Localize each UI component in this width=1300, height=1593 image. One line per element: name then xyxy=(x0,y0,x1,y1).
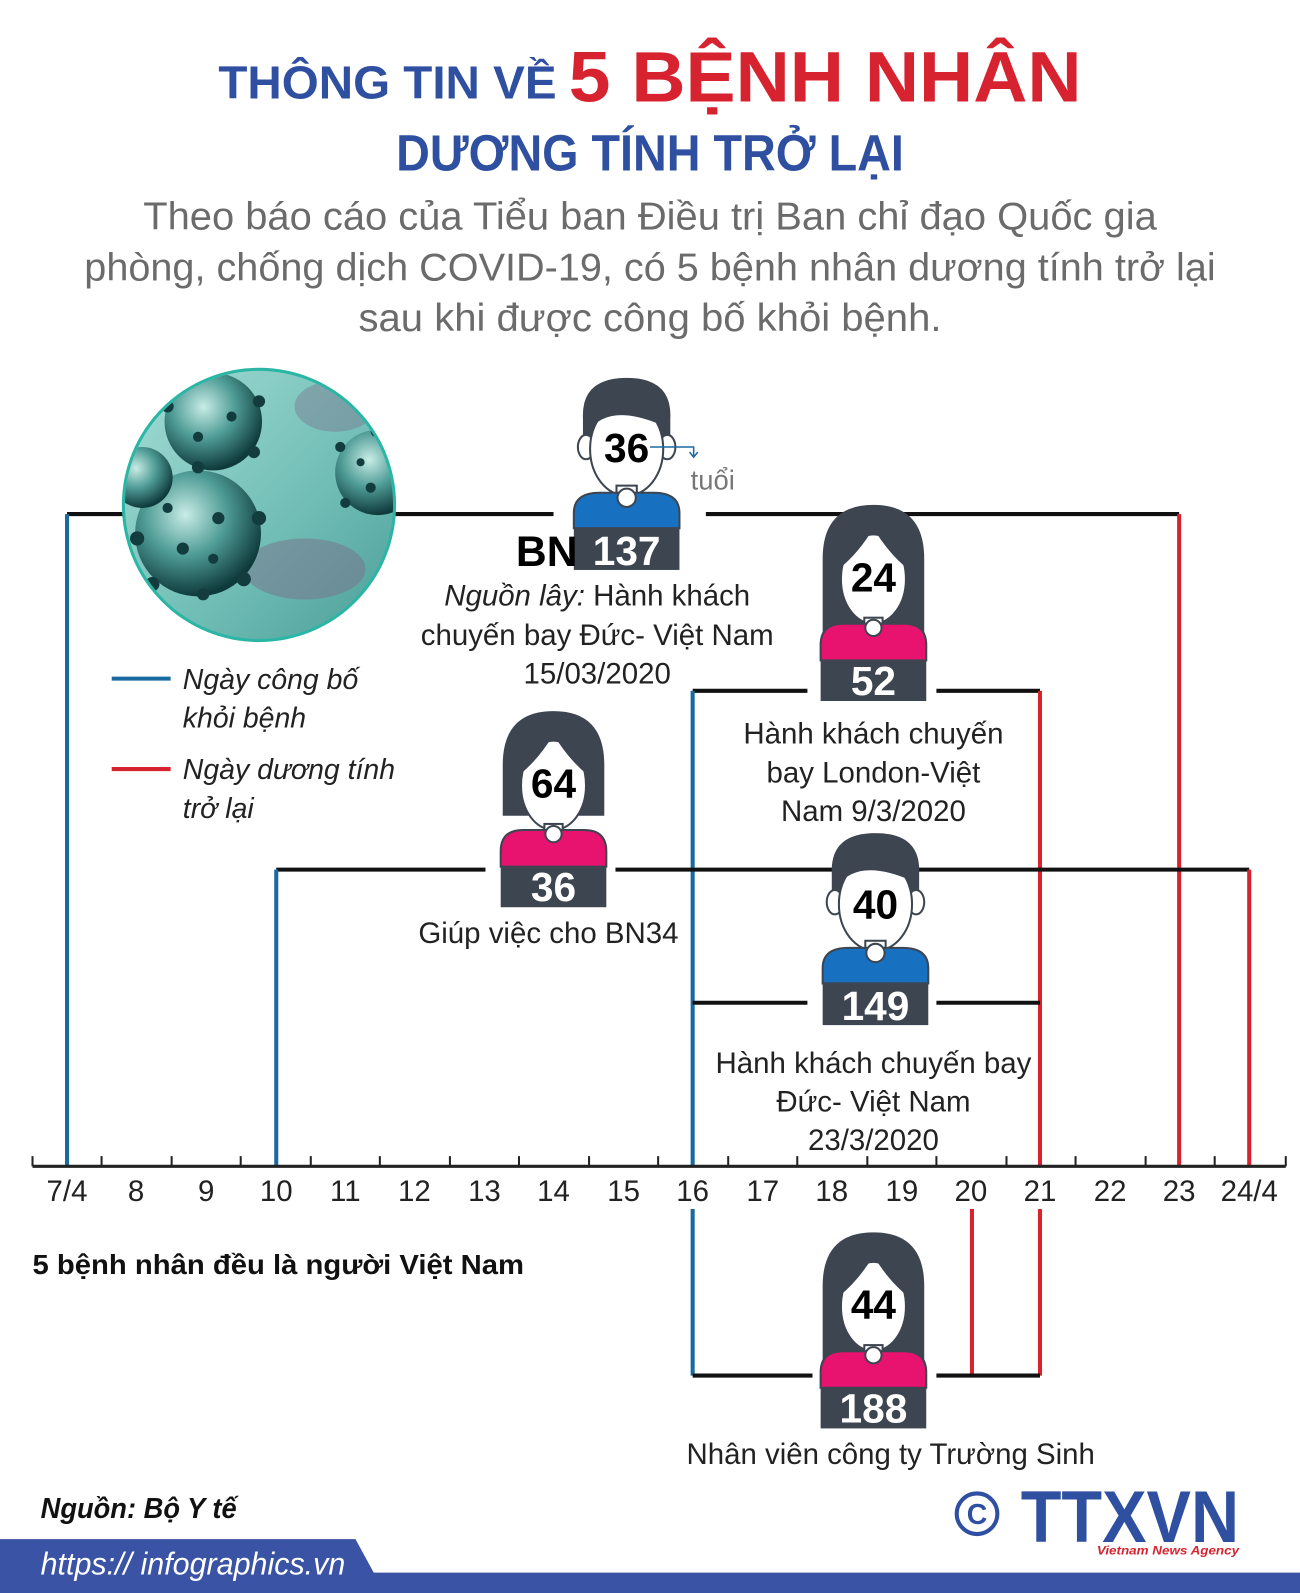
text: BN52 source: Nam 9/3/2020 xyxy=(781,795,966,828)
source: Nguồn: Bộ Y tế xyxy=(41,1493,240,1525)
text: BN137 source: Nguồn lây: Hành khách xyxy=(444,579,750,613)
title: 5 BỆNH NHÂN xyxy=(569,38,1082,118)
legend: Ngày dương tính xyxy=(183,754,395,786)
text: BN137 source xyxy=(421,579,774,691)
patient BN36 (female, 64) xyxy=(501,711,606,910)
logo: TTXVN: C xyxy=(967,1499,987,1531)
patient BN36 (female, 64): 36 xyxy=(531,864,576,910)
patient BN137 (male, 36): 137 xyxy=(593,528,661,574)
date axis: 23 xyxy=(1163,1175,1196,1208)
subtitle xyxy=(84,196,1216,340)
title: THÔNG TIN VỀ xyxy=(218,57,557,109)
text: BN52 source xyxy=(743,718,1004,828)
date axis xyxy=(32,1156,1286,1208)
logo: TTXVN: TTXVN xyxy=(1021,1477,1239,1558)
date axis: 9 xyxy=(198,1175,214,1208)
subtitle: Theo báo cáo của Tiểu ban Điều trị Ban chỉ đạo Quốc gia xyxy=(143,196,1157,239)
note: nationality: 5 bệnh nhân đều là người Việt Nam xyxy=(32,1249,524,1280)
text: BN149 source: Đức- Việt Nam xyxy=(776,1085,971,1118)
date axis: 11 xyxy=(330,1175,361,1208)
patient BN52 (female, 24): 24 xyxy=(851,554,896,600)
patient BN149 (male, 40): 40 xyxy=(853,881,898,927)
patient BN36 (female, 64): 64 xyxy=(531,761,577,807)
date axis: 15 xyxy=(607,1175,640,1208)
patient BN52 (female, 24): 52 xyxy=(851,658,896,704)
date axis: 13 xyxy=(468,1175,501,1208)
text: BN149 source: Hành khách chuyến bay xyxy=(716,1047,1032,1080)
legend: khỏi bệnh xyxy=(183,702,306,734)
text: BN52 source: bay London-Việt xyxy=(767,756,980,789)
text: BN149 source: 23/3/2020 xyxy=(808,1124,939,1157)
patient BN137 (male, 36) xyxy=(516,378,735,576)
date axis: 18 xyxy=(815,1175,848,1208)
date axis: 7/4 xyxy=(47,1175,87,1208)
patient BN137 (male, 36): tuổi xyxy=(691,465,735,496)
legend xyxy=(112,664,395,825)
logo: TTXVN: Vietnam News Agency xyxy=(1097,1543,1240,1557)
subtitle: phòng, chống dịch COVID-19, có 5 bệnh nhân dương tính trở lại xyxy=(84,246,1216,289)
patient BN137 (male, 36): 36 xyxy=(604,425,649,471)
patient BN188 (female, 44): 44 xyxy=(851,1282,896,1328)
date axis: 20 xyxy=(955,1175,987,1208)
date axis: 17 xyxy=(746,1175,779,1208)
date axis: 12 xyxy=(398,1175,431,1208)
text: BN137 source: chuyến bay Đức- Việt Nam xyxy=(421,619,774,652)
date axis: 19 xyxy=(886,1175,918,1208)
text: BN188 source: Nhân viên công ty Trường Sinh xyxy=(687,1438,1095,1471)
subtitle: sau khi được công bố khỏi bệnh. xyxy=(359,297,941,340)
legend: Ngày công bố xyxy=(183,664,360,696)
date axis: 21 xyxy=(1024,1175,1056,1208)
footer band xyxy=(0,1539,1300,1593)
virus image xyxy=(122,368,396,642)
date axis: 22 xyxy=(1094,1175,1126,1208)
patient BN149 (male, 40) xyxy=(823,833,928,1029)
title xyxy=(218,38,1082,182)
date axis: 14 xyxy=(537,1175,570,1208)
patient BN52 (female, 24) xyxy=(821,505,926,704)
footer band: https:// infographics.vn xyxy=(41,1547,345,1582)
patient BN188 (female, 44): 188 xyxy=(840,1385,907,1431)
date axis: 24/4 xyxy=(1221,1175,1278,1208)
date axis: 16 xyxy=(676,1175,709,1208)
text: BN36 source: Giúp việc cho BN34 xyxy=(418,917,679,950)
patient BN149 (male, 40): 149 xyxy=(842,983,909,1029)
patient BN137 (male, 36): BN xyxy=(516,528,578,576)
date axis: 10 xyxy=(260,1175,293,1208)
timeline lines xyxy=(67,514,1249,1376)
text: BN149 source xyxy=(716,1047,1032,1157)
text: BN137 source: 15/03/2020 xyxy=(524,658,671,691)
text: BN52 source: Hành khách chuyến xyxy=(743,718,1004,751)
date axis: 8 xyxy=(128,1175,144,1208)
patient BN188 (female, 44) xyxy=(821,1232,926,1431)
legend: trở lại xyxy=(183,793,254,825)
title: DƯƠNG TÍNH TRỞ LẠI xyxy=(396,125,904,182)
